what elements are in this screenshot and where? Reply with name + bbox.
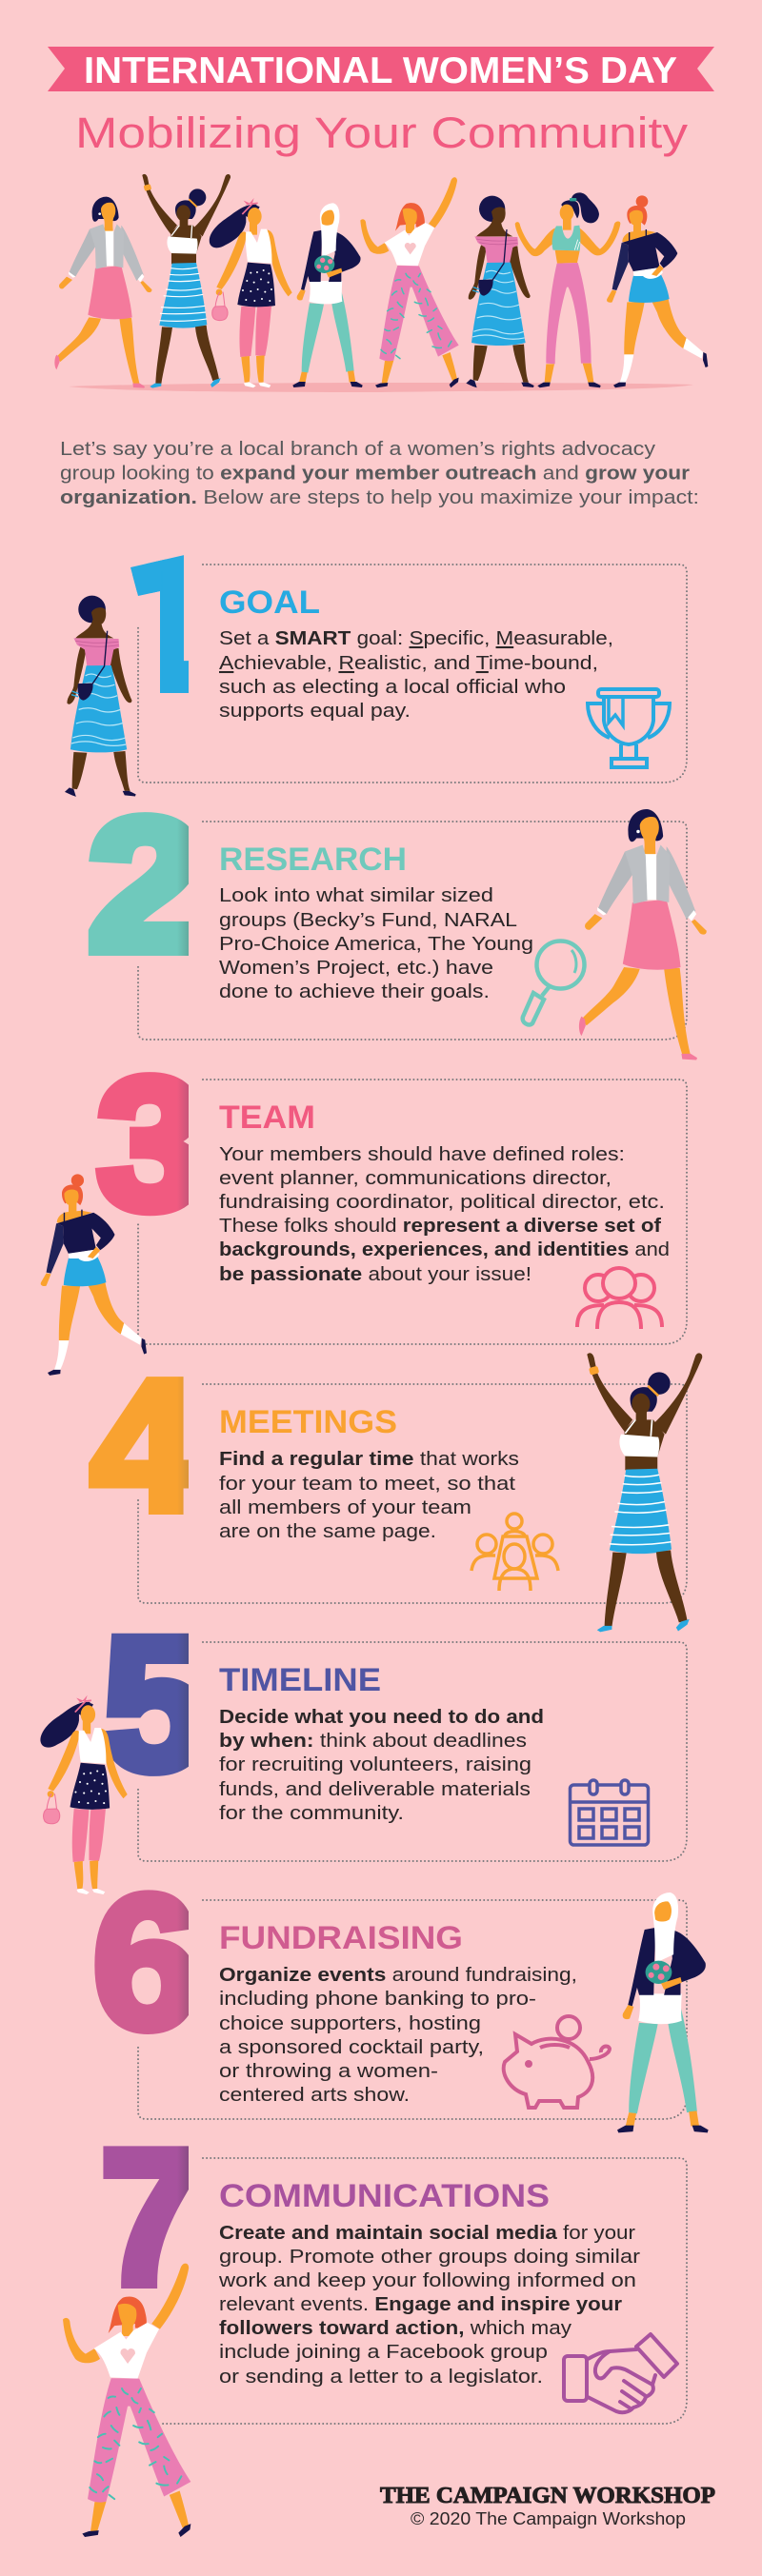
body text — [219, 627, 613, 722]
body text: backgrounds, experiences, and identities and — [219, 1238, 670, 1260]
dotted frame — [138, 1384, 687, 1603]
dotted frame — [138, 1900, 687, 2119]
body text: all members of your team — [219, 1496, 471, 1518]
body text: Find a regular time that works — [219, 1448, 519, 1470]
copyright: © 2020 The Campaign Workshop — [411, 2509, 686, 2528]
body text: Your members should have defined roles: — [219, 1143, 625, 1165]
body text: Set a SMART goal: Specific, Measurable, — [219, 627, 613, 649]
body text: relevant events. Engage and inspire your — [219, 2293, 622, 2315]
body text: funds, and deliverable materials — [219, 1778, 531, 1800]
heading: timeline: TIMELINE — [219, 1662, 381, 1698]
woman: arms raised, striped skirt — [587, 1353, 702, 1632]
body text: include joining a Facebook group — [219, 2341, 548, 2363]
body text: including phone banking to pro- — [219, 1988, 536, 2010]
body text: work and keep your following informed on — [218, 2269, 636, 2291]
body text: for your team to meet, so that — [219, 1473, 515, 1495]
body text — [219, 1706, 544, 1824]
group illustration: eight women — [54, 174, 708, 392]
icon: meeting table — [471, 1514, 558, 1591]
icon: magnifying glass — [523, 941, 585, 1024]
body text — [218, 2222, 640, 2388]
title banner: INTERNATIONAL WOMEN’S DAY — [84, 50, 677, 91]
woman: hijab with bouquet — [617, 1892, 709, 2132]
icon: handshake — [564, 2334, 677, 2412]
number 7: 7 — [101, 2111, 200, 2324]
body text — [219, 1964, 577, 2106]
panel: step 7 communications — [63, 2111, 687, 2537]
body text — [219, 884, 533, 1002]
panel: step 5 timeline — [40, 1634, 688, 1894]
dotted frame — [138, 1080, 687, 1344]
body text: by when: think about deadlines — [219, 1730, 527, 1752]
number 6: 6 — [92, 1856, 199, 2069]
body text: Decide what you need to do and — [219, 1706, 544, 1728]
dotted frame — [138, 822, 687, 1040]
icon: piggy bank — [504, 2016, 610, 2108]
intro text — [60, 438, 699, 508]
number 3: 3 — [97, 1040, 204, 1248]
heading: research: RESEARCH — [219, 842, 407, 878]
body text: followers toward action, which may — [219, 2317, 572, 2339]
panel: step 6 fundraising — [94, 1890, 709, 2132]
heading: team: TEAM — [219, 1100, 315, 1136]
intro text: Let’s say you’re a local branch of a women’s rights advocacy — [60, 438, 656, 460]
body text: are on the same page. — [219, 1520, 436, 1542]
dotted frame — [138, 565, 687, 783]
heading: meetings: MEETINGS — [219, 1404, 397, 1440]
number 4: 4 — [90, 1341, 197, 1550]
dotted frame — [160, 2158, 687, 2424]
body text: centered arts show. — [219, 2084, 410, 2106]
panel: step 4 meetings — [90, 1341, 702, 1632]
intro text: organization. Below are steps to help you maximize your impact: — [60, 486, 699, 508]
heading: goal: GOAL — [219, 585, 320, 621]
panel: step 1 goal — [65, 555, 688, 797]
body text: Achievable, Realistic, and Time-bound, — [219, 652, 598, 674]
woman: heart shirt, arm raised — [63, 2264, 190, 2537]
woman: off-shoulder dress — [65, 596, 136, 797]
body text: a sponsored cocktail party, — [219, 2036, 484, 2058]
body text: for the community. — [219, 1802, 404, 1824]
body text: or sending a letter to a legislator. — [219, 2366, 543, 2388]
body text: or throwing a women- — [219, 2060, 438, 2082]
panel: step 3 team — [41, 1040, 687, 1376]
body text: Look into what similar sized — [219, 884, 493, 906]
icon: trophy — [588, 689, 670, 767]
number 2: 2 — [89, 781, 203, 989]
body text: Women’s Project, etc.) have — [219, 957, 493, 979]
body text: group. Promote other groups doing similar — [219, 2246, 640, 2268]
body text: supports equal pay. — [219, 700, 411, 722]
body text: event planner, communications director, — [219, 1167, 612, 1189]
body text: be passionate about your issue! — [219, 1263, 531, 1285]
body text: fundraising coordinator, political director, etc. — [219, 1191, 665, 1213]
number 1: 1 — [112, 518, 204, 735]
dotted frame — [138, 1642, 687, 1861]
woman: grey jacket — [579, 809, 707, 1060]
icon: group of people — [577, 1268, 662, 1329]
body text: for recruiting volunteers, raising — [219, 1754, 531, 1775]
body text: such as electing a local official who — [219, 676, 566, 698]
body text: These folks should represent a diverse set of — [219, 1215, 661, 1237]
woman: navy top with red bun — [41, 1174, 147, 1376]
body text — [219, 1143, 670, 1285]
body text: Pro-Choice America, The Young — [219, 933, 533, 955]
body text: Create and maintain social media for your — [219, 2222, 635, 2244]
body text — [219, 1448, 519, 1542]
subtitle: Mobilizing Your Community — [75, 109, 689, 157]
footer logo: THE CAMPAIGN WORKSHOP — [380, 2484, 715, 2508]
heading: communications: COMMUNICATIONS — [219, 2178, 550, 2214]
body text: groups (Becky’s Fund, NARAL — [219, 909, 517, 931]
body text: choice supporters, hosting — [219, 2012, 481, 2034]
panel: step 2 research — [88, 809, 707, 1060]
woman: flowing hair, dotted skirt — [40, 1695, 128, 1894]
intro text: group looking to expand your member outreach and grow your — [60, 463, 690, 484]
heading: fundraising: FUNDRAISING — [219, 1920, 463, 1956]
icon: calendar — [570, 1780, 648, 1845]
body text: Organize events around fundraising, — [219, 1964, 577, 1986]
body text: done to achieve their goals. — [219, 981, 490, 1002]
number 5: 5 — [103, 1598, 208, 1809]
